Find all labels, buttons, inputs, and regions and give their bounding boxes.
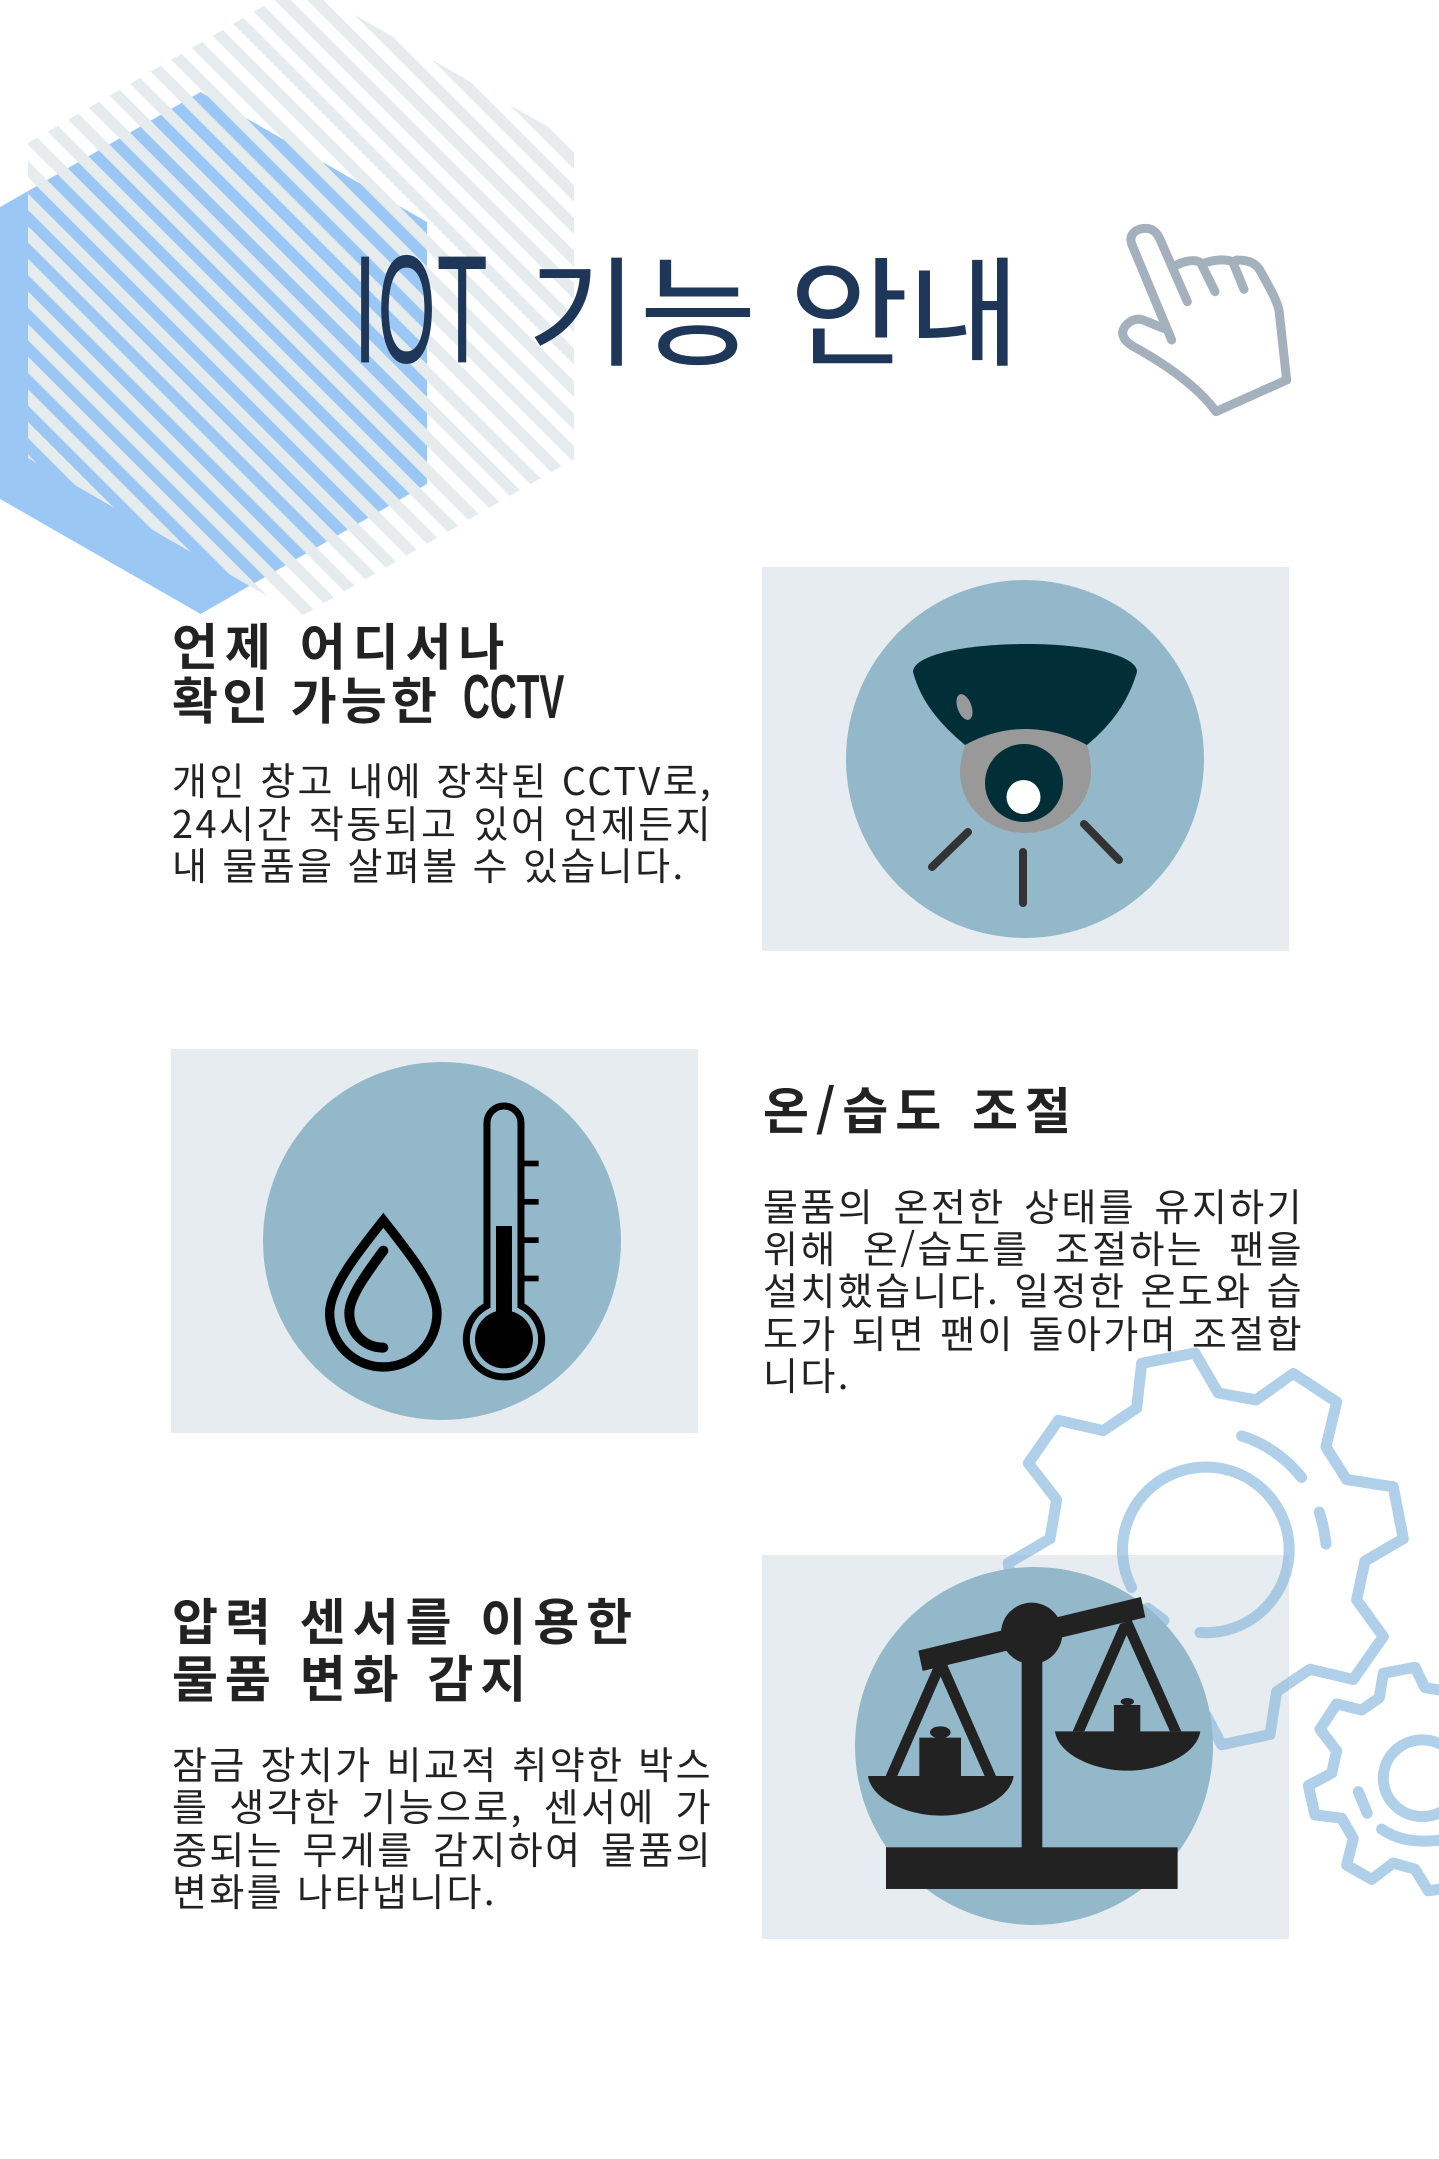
panel: temperature and humidity <box>171 1049 698 1433</box>
text block: pressure sensor description: 잠금 장치가 비교적 취약한 박스 <box>172 1735 713 1790</box>
heading: pressure sensor: 물품 변화 감지 <box>172 1640 533 1712</box>
decorative blue hexagon <box>0 92 427 614</box>
title: 안 <box>789 219 908 390</box>
icon: CCTV camera <box>913 644 1137 903</box>
text block: temperature and humidity description: 위해 온/습도를 조절하는 팬을 <box>763 1219 1304 1274</box>
text block: CCTV description <box>172 751 713 891</box>
panel: CCTV <box>762 567 1289 951</box>
text block: temperature and humidity description: 도가 되면 팬이 돌아가며 조절합 <box>763 1304 1304 1359</box>
title: 기 <box>528 219 637 390</box>
title: T <box>437 224 487 394</box>
text block: CCTV description: 내 물품을 살펴볼 수 있습니다. <box>172 836 685 891</box>
title: 내 <box>908 220 1020 390</box>
icon: balance scale <box>868 1597 1200 1889</box>
text block: temperature and humidity description: 설치했습니다. 일정한 온도와 습 <box>763 1261 1304 1316</box>
text block: temperature and humidity description <box>763 1177 1304 1401</box>
text block: temperature and humidity description: 니다. <box>763 1346 851 1401</box>
heading: CCTV: CCTV <box>463 663 564 732</box>
panel: pressure sensor background <box>762 1555 1289 1939</box>
heading: pressure sensor: 압력 센서를 이용한 <box>172 1583 639 1655</box>
heading: CCTV: 확인 가능한 <box>172 662 441 734</box>
text block: pressure sensor description <box>172 1735 713 1917</box>
title: 능 <box>640 220 756 391</box>
heading: CCTV <box>172 608 564 734</box>
text block: CCTV description: 24시간 작동되고 있어 언제든지 <box>172 794 713 849</box>
icon: pointing hand <box>1123 228 1287 412</box>
text block: CCTV description: 개인 창고 내에 장착된 CCTV로, <box>172 751 713 806</box>
decorative gears <box>1008 1353 1439 1891</box>
heading: pressure sensor <box>172 1583 639 1712</box>
icon: water drop and thermometer <box>330 1106 542 1377</box>
heading: CCTV: 언제 어디서나 <box>172 608 511 680</box>
title: I <box>354 224 376 395</box>
text block: pressure sensor description: 중되는 무게를 감지하여 물품의 <box>172 1820 713 1875</box>
text block: temperature and humidity description: 물품의 온전한 상태를 유지하기 <box>763 1177 1304 1232</box>
panel: pressure sensor circle <box>855 1567 1213 1925</box>
title <box>354 219 1020 395</box>
decorative striped hexagon <box>28 0 574 616</box>
text block: pressure sensor description: 변화를 나타냅니다. <box>172 1862 497 1917</box>
heading: temperature and humidity: 온/습도 조절 <box>763 1072 1078 1144</box>
title: O <box>378 226 435 395</box>
text block: pressure sensor description: 를 생각한 기능으로, 센서에 가 <box>172 1777 713 1832</box>
